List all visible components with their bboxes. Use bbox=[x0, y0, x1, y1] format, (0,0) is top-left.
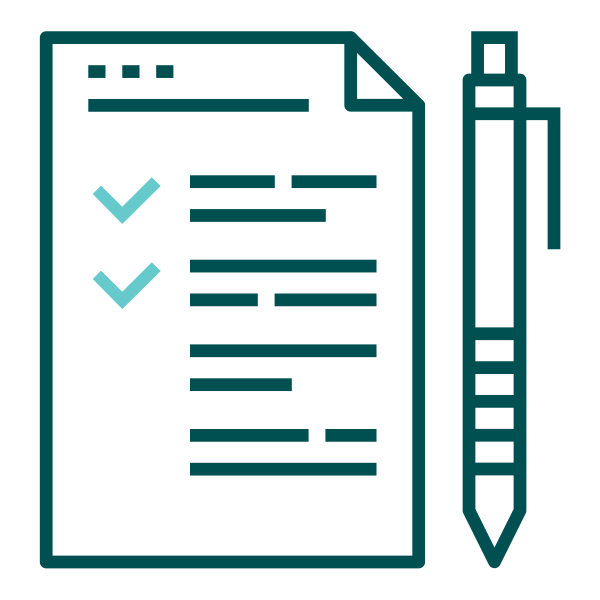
icon: document page bbox=[46, 38, 419, 562]
pen button bbox=[478, 38, 511, 80]
pen bands bbox=[469, 114, 520, 469]
icon: second check mark bbox=[93, 262, 161, 309]
document header lines bbox=[88, 65, 309, 112]
document text lines bbox=[190, 175, 376, 476]
pen clip bbox=[520, 114, 554, 249]
icon: first check mark bbox=[93, 177, 161, 224]
pen body bbox=[469, 80, 520, 562]
icon: pen bbox=[469, 38, 554, 562]
